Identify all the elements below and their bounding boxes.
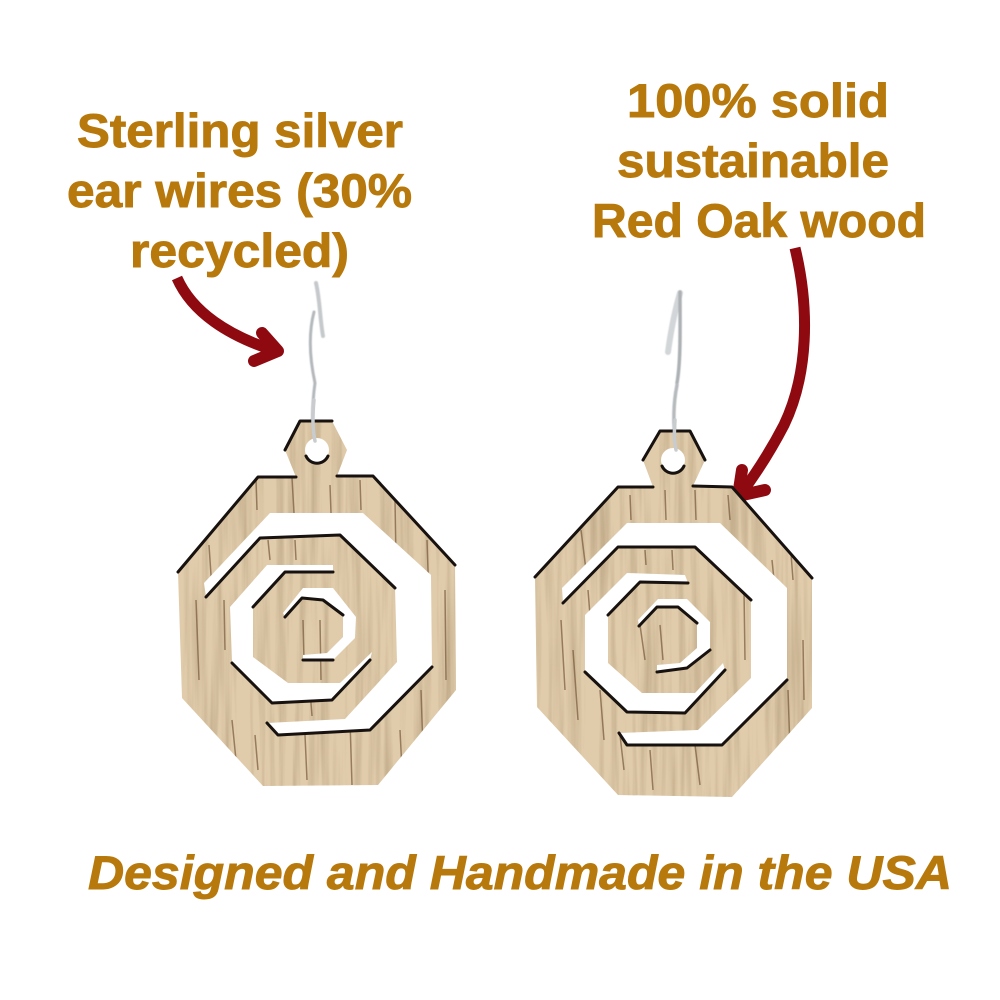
ear wire: right: [668, 292, 680, 445]
arrow: to wood: [738, 248, 805, 496]
callout: red oak wood: sustainable: [617, 134, 889, 187]
spiral cutout: right inner: [638, 599, 710, 672]
ear wire loop: right: [674, 420, 676, 450]
spiral cutout: right outer: [562, 523, 787, 745]
arrow: to ear wire: [177, 278, 278, 361]
callout: red oak wood: Red Oak wood: [592, 194, 926, 247]
ear wire loop: left: [313, 400, 315, 441]
ear wire: left: [310, 283, 323, 441]
product infographic: [68, 82, 949, 900]
ear hole: right: [661, 448, 685, 472]
callout: sterling silver ear wires: recycled): [130, 224, 349, 277]
wood body: right: [530, 425, 820, 805]
tagline: Designed and Handmade in the USA: [88, 846, 952, 899]
ear hole: left: [305, 438, 329, 462]
callout: sterling silver ear wires: [67, 104, 412, 277]
callout: red oak wood: [592, 74, 926, 247]
wood body: left: [170, 415, 465, 795]
right earring: [530, 292, 820, 805]
callout: red oak wood: 100% solid: [627, 74, 889, 127]
cut shadows: left: [178, 421, 455, 735]
callout: sterling silver ear wires: ear wires (30%: [67, 164, 412, 217]
spiral cutout: left inner: [283, 588, 356, 660]
spiral cutout: right middle: [585, 573, 725, 713]
left earring: [170, 283, 465, 795]
cut shadows: right: [535, 431, 812, 745]
callout: sterling silver ear wires: Sterling silver: [77, 104, 403, 157]
spiral cutout: left middle: [230, 565, 372, 703]
spiral cutout: left outer: [204, 513, 432, 735]
